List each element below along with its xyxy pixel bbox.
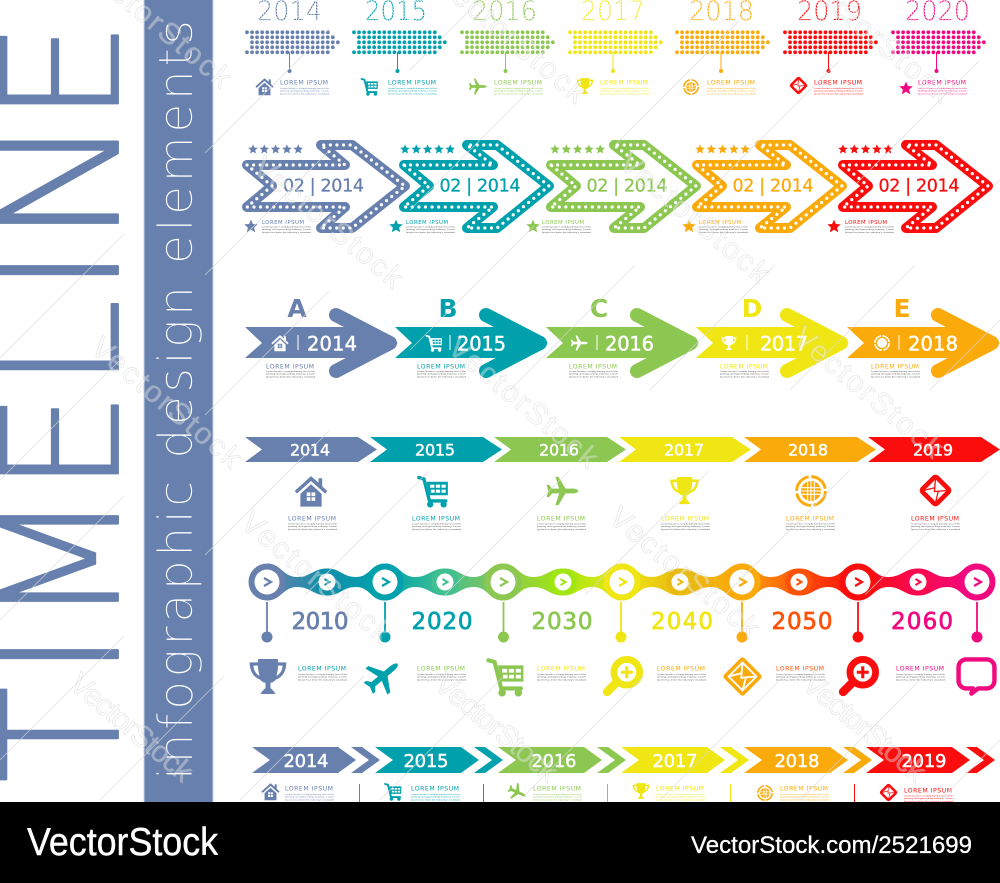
captions row 4: LOREM IPSUM — [786, 516, 834, 522]
arrow: teal 02|2014 — [404, 145, 549, 228]
captions row 6: LOREM IPSUM — [780, 786, 828, 792]
captions row 3: LOREM IPSUM — [871, 364, 919, 370]
years row 4: 2019 — [913, 440, 953, 460]
captions row 6: LOREM IPSUM — [533, 786, 581, 792]
arrow: green 02|2014: 02 | 2014 — [586, 176, 668, 196]
watermark overlay: VectorStock — [603, 501, 766, 645]
years row 6: 2015 — [404, 751, 448, 772]
years row 4: 2016 — [539, 440, 579, 460]
timeline row 1: dotted arrows — [247, 0, 986, 96]
icons row 4 — [295, 476, 950, 508]
years row 4: 2018 — [788, 440, 828, 460]
icons row 5 — [250, 651, 994, 701]
watermark overlay: VectorStock — [235, 506, 398, 650]
years row 6: 2018 — [774, 751, 820, 772]
arrow shapes — [245, 315, 1000, 371]
captions row 5: LOREM IPSUM — [298, 666, 346, 672]
captions row 1: LOREM IPSUM — [494, 80, 542, 86]
years row 4: 2014 — [290, 440, 330, 460]
captions row 2 — [244, 220, 895, 234]
captions row 1: LOREM IPSUM — [814, 80, 862, 86]
watermark overlay: VectorStock — [85, 331, 248, 475]
dotted arrows with connectors — [247, 32, 986, 73]
watermark overlay: VectorStock — [442, 331, 605, 475]
captions row 3: LOREM IPSUM — [720, 364, 768, 370]
years row 6: 2017 — [652, 751, 698, 772]
white icons, dividers and years — [271, 332, 958, 356]
timeline row 4: ribbon arrows — [245, 437, 1000, 531]
panel: subtitle band: infographic design elements — [149, 20, 204, 780]
watermark overlay: VectorStock — [796, 667, 933, 789]
captions row 4: LOREM IPSUM — [911, 516, 959, 522]
captions row 6 — [285, 786, 954, 803]
letters A-E: D — [742, 294, 762, 323]
captions row 3: LOREM IPSUM — [266, 364, 314, 370]
arrow: blue 02|2014: 02 | 2014 — [283, 176, 364, 196]
captions row 4: LOREM IPSUM — [537, 516, 585, 522]
watermark overlay: VectorStock — [63, 667, 200, 789]
title: TIMELINE vertical lettering — [0, 21, 157, 783]
timeline row 3: bold arrows A-E — [245, 294, 1000, 378]
captions row 2: LOREM IPSUM — [845, 220, 887, 226]
gradient chain band — [267, 564, 977, 600]
captions row 5 — [298, 666, 946, 681]
watermark overlay: VectorStock — [787, 321, 950, 465]
arrow: red 02|2014 — [843, 145, 988, 228]
captions row 6: LOREM IPSUM — [656, 786, 704, 792]
captions row 1: LOREM IPSUM — [707, 80, 755, 86]
arrow: orange 02|2014: 02 | 2014 — [732, 176, 814, 196]
years row 6: 2019 — [902, 751, 946, 772]
letters A-E: B — [438, 294, 458, 323]
years row 6: 2014 — [284, 751, 328, 772]
decade labels: 2010 — [292, 609, 348, 635]
captions row 5: LOREM IPSUM — [776, 666, 824, 672]
thin dashed year labels — [257, 0, 970, 27]
captions row 4: LOREM IPSUM — [412, 516, 460, 522]
ribbons — [245, 437, 1000, 462]
dividers row 6 — [360, 784, 854, 802]
years row 4: 2017 — [664, 440, 704, 460]
captions row 5: LOREM IPSUM — [417, 666, 465, 672]
captions row 4 — [288, 516, 961, 531]
years row 4 — [290, 440, 953, 460]
letters A-E: A — [287, 294, 307, 323]
letters A-E: E — [893, 294, 911, 323]
captions row 2: LOREM IPSUM — [262, 220, 304, 226]
chain nodes — [248, 564, 996, 600]
captions row 2: LOREM IPSUM — [406, 220, 448, 226]
years row 4: 2015 — [415, 440, 455, 460]
captions row 1: LOREM IPSUM — [280, 80, 328, 86]
decade labels: 2060 — [891, 609, 953, 635]
pins below large nodes — [262, 602, 982, 642]
white icons, dividers and years: 2015 — [457, 332, 506, 356]
letters A-E — [287, 294, 911, 323]
letters A-E: C — [590, 294, 608, 323]
captions row 4: LOREM IPSUM — [288, 516, 336, 522]
years row 6: 2016 — [532, 751, 576, 772]
footer bar — [0, 802, 1000, 883]
captions row 3: LOREM IPSUM — [569, 364, 617, 370]
decade labels: 2050 — [772, 609, 832, 635]
decade labels: 2040 — [651, 609, 713, 635]
footer brand: VectorStock — [27, 821, 218, 864]
captions row 1 — [280, 80, 968, 95]
arrow: green 02|2014 — [551, 145, 696, 228]
watermark overlay: VectorStock — [428, 667, 565, 789]
white icons, dividers and years: 2014 — [307, 332, 357, 356]
arrow: blue 02|2014 — [247, 145, 405, 228]
timeline row 6: ribbon arrows with chevrons — [252, 747, 995, 804]
captions row 3: LOREM IPSUM — [417, 364, 465, 370]
captions row 2: LOREM IPSUM — [542, 220, 584, 226]
captions row 6: LOREM IPSUM — [285, 786, 333, 792]
icons row 6 — [261, 781, 896, 804]
captions row 5: LOREM IPSUM — [657, 666, 705, 672]
arrow: red 02|2014: 02 | 2014 — [878, 176, 960, 196]
captions row 5: LOREM IPSUM — [896, 666, 944, 672]
star ratings — [248, 144, 893, 153]
white icons, dividers and years: 2018 — [908, 332, 958, 356]
decade labels — [292, 609, 953, 635]
white icons, dividers and years: 2016 — [605, 332, 654, 356]
captions row 1: LOREM IPSUM — [388, 80, 436, 86]
footer image id: VectorStock.com/2521699 — [691, 832, 972, 859]
white icons, dividers and years: 2017 — [760, 332, 808, 356]
captions row 4: LOREM IPSUM — [661, 516, 709, 522]
arrow: teal 02|2014: 02 | 2014 — [440, 176, 520, 196]
ribbons and chevrons — [252, 747, 995, 773]
captions row 5: LOREM IPSUM — [537, 666, 585, 672]
decade labels: 2020 — [412, 609, 472, 635]
watermark overlay: VectorStock — [247, 151, 410, 295]
icons row 1 — [255, 78, 913, 96]
captions row 3 — [266, 364, 921, 378]
timeline row 2: outlined dotted chevron arrows — [244, 144, 988, 234]
watermark overlay: VectorStock — [613, 146, 776, 290]
timeline row 5: chain of nodes 2010-2060 — [248, 564, 996, 701]
captions row 1: LOREM IPSUM — [600, 80, 648, 86]
years row 6 — [284, 751, 946, 772]
captions row 2: LOREM IPSUM — [699, 220, 741, 226]
captions row 1: LOREM IPSUM — [918, 80, 966, 86]
arrow: orange 02|2014 — [697, 145, 842, 228]
captions row 6: LOREM IPSUM — [411, 786, 459, 792]
decade labels: 2030 — [532, 609, 592, 635]
captions row 6: LOREM IPSUM — [904, 788, 952, 794]
